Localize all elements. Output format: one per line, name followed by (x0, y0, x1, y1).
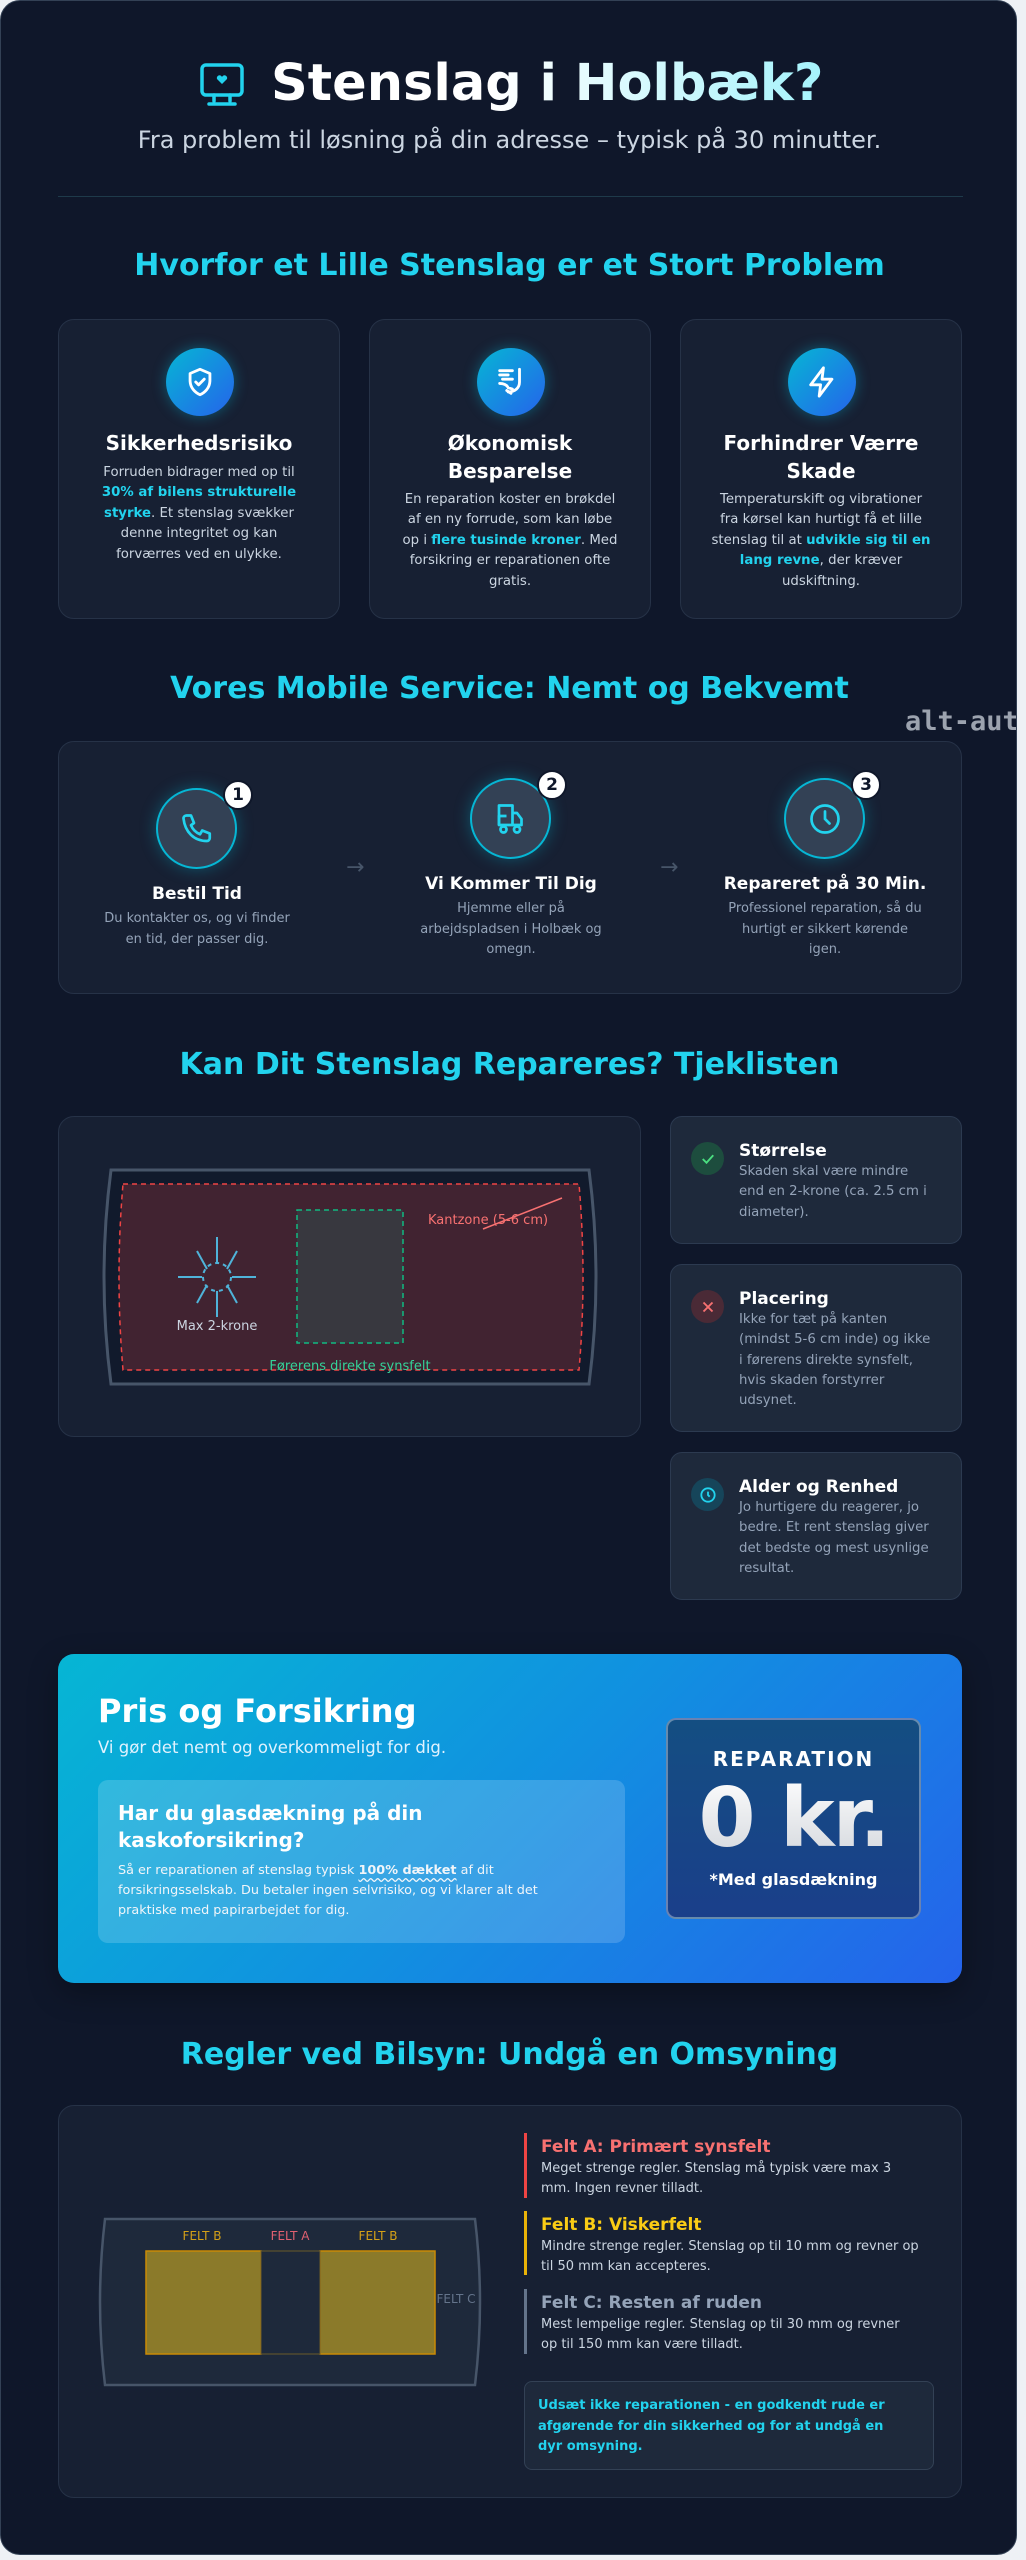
card text: Temperaturskift og vibrationer (720, 492, 922, 507)
card text: op i flere tusinde kroner. Med (403, 533, 617, 548)
badge 1: 1 (232, 785, 244, 805)
icon: shield (166, 348, 234, 416)
price title: Pris og Forsikring (98, 1692, 416, 1730)
edge zone (119, 1184, 583, 1370)
badge 2: 2 (546, 775, 558, 795)
rule: felt A: Meget strenge regler. Stenslag må typisk være max 3 (541, 2161, 891, 2176)
card text: fra kørsel kan hurtigt få et lille (720, 512, 922, 527)
icon: monitor heart (200, 63, 244, 106)
card text (102, 465, 296, 562)
step text: arbejdspladsen i Holbæk og (420, 922, 602, 936)
icon: cross (691, 1290, 724, 1323)
card text: forsikring er reparationen ofte (410, 553, 610, 568)
heading: inspection: Regler ved Bilsyn: Undgå en Omsyning (181, 2037, 838, 2072)
checklist: size: end en 2-krone (ca. 2.5 cm i (739, 1184, 927, 1199)
checklist: age: bedre. Et rent stenslag giver (739, 1520, 929, 1535)
card title: Økonomisk (448, 431, 572, 455)
subtitle: Fra problem til løsning på din adresse – typisk på 30 minutter. (138, 126, 881, 154)
card title: Skade (786, 459, 856, 483)
checklist: age: Alder og Renhed (739, 1477, 898, 1497)
insurance box: praktiske med papirarbejdet for dig. (118, 1903, 349, 1918)
icon: phone (156, 788, 237, 869)
panel: economy (369, 319, 651, 619)
price box: REPARATION (713, 1747, 874, 1771)
checklist: placement: (mindst 5-6 cm inde) og ikke (739, 1332, 930, 1347)
checklist: placement: udsynet. (739, 1393, 797, 1408)
rule: felt B: Felt B: Viskerfelt (541, 2215, 701, 2235)
rule: felt B: til 50 mm kan accepteres. (541, 2259, 711, 2274)
insurance box: forsikringsselskab. Du betaler ingen selvrisiko, og vi klarer alt det (118, 1883, 538, 1898)
card title: Forhindrer Værre (724, 431, 918, 455)
panel: price and insurance (58, 1654, 962, 1983)
zone diagram: FELT C (436, 2292, 476, 2306)
checklist: placement: Placering (739, 1289, 829, 1309)
icon: bolt (788, 348, 856, 416)
card text: gratis. (489, 574, 531, 589)
callout note: dyr omsyning. (538, 2439, 643, 2454)
panel: process (58, 741, 962, 994)
step text: en tid, der passer dig. (126, 932, 268, 946)
card text: lang revne, der kræver (740, 553, 902, 568)
panel: inspection rules (58, 2105, 962, 2498)
step text: Hjemme eller på (457, 901, 565, 916)
card title: Sikkerhedsrisiko (106, 431, 292, 455)
price subtitle: Vi gør det nemt og overkommeligt for dig. (98, 1738, 446, 1757)
card text: Forruden bidrager med op til (103, 465, 295, 480)
checklist: age: resultat. (739, 1561, 794, 1576)
card text: forværres ved en ulykke. (116, 547, 282, 562)
card text: stenslag til at udvikle sig til en (711, 533, 931, 548)
driver view zone (269, 1210, 431, 1374)
checklist: placement: Ikke for tæt på kanten (739, 1312, 887, 1327)
panel: safety (58, 319, 340, 619)
icon: check (691, 1142, 724, 1175)
checklist: size: Skaden skal være mindre (739, 1164, 908, 1179)
heading: why: Hvorfor et Lille Stenslag er et Stort Problem (134, 248, 885, 283)
rule: felt A (524, 2133, 944, 2198)
step text: hurtigt er sikkert kørende (742, 922, 908, 936)
rule: felt A: mm. Ingen revner tilladt. (541, 2181, 703, 2196)
heading: service: Vores Mobile Service: Nemt og Bekvemt (170, 671, 849, 706)
card text: udskiftning. (782, 574, 860, 589)
step 1 (104, 780, 290, 946)
checklist: age: det bedste og mest usynlige (739, 1541, 929, 1556)
step title: Vi Kommer Til Dig (425, 874, 597, 894)
icon: clock (691, 1478, 724, 1511)
edge zone: Kantzone (5-6 cm) (428, 1213, 548, 1228)
checklist: placement: i førerens direkte synsfelt, (739, 1353, 913, 1368)
arrow: → (660, 855, 678, 880)
card text (403, 492, 617, 589)
step text: igen. (809, 942, 841, 957)
icon: truck (470, 778, 551, 859)
step text (420, 900, 602, 957)
checklist: size: diameter). (739, 1205, 809, 1220)
heading: checklist: Kan Dit Stenslag Repareres? Tjeklisten (180, 1047, 839, 1082)
rule: felt B (524, 2211, 944, 2275)
step text: omegn. (486, 942, 536, 957)
badge 3 (851, 770, 881, 800)
icon: clock (784, 778, 865, 859)
rule: felt C: Mest lempelige regler. Stenslag op til 30 mm og revner (541, 2317, 900, 2332)
card text (711, 492, 931, 589)
driver view zone: Førerens direkte synsfelt (269, 1359, 431, 1374)
card title (724, 431, 918, 483)
price box (666, 1718, 921, 1919)
card text: denne integritet og kan (121, 526, 277, 541)
checklist: age: Jo hurtigere du reagerer, jo (739, 1500, 919, 1515)
rule: felt C: Felt C: Resten af ruden (541, 2293, 762, 2313)
price box: 0 kr. (698, 1771, 889, 1866)
zone diagram (98, 2218, 482, 2386)
insurance box: Har du glasdækning på din (118, 1801, 423, 1825)
card title (448, 431, 572, 483)
step text (728, 900, 922, 957)
zone diagram: FELT B (183, 2229, 221, 2243)
insurance box: Så er reparationen af stenslag typisk 100% dækket af dit (118, 1863, 494, 1878)
rule: felt C (524, 2289, 944, 2354)
icon: crack (177, 1237, 257, 1334)
title text: Stenslag i Holbæk? (271, 54, 823, 113)
card text: af en ny forrude, som kan løbe (408, 512, 612, 527)
checklist: size (670, 1116, 962, 1244)
badge 3: 3 (860, 775, 872, 795)
checklist: size: Størrelse (739, 1141, 827, 1161)
checklist: placement (670, 1264, 962, 1432)
insurance box (98, 1780, 625, 1943)
insurance box: kaskoforsikring? (118, 1828, 304, 1852)
checklist: placement: hvis skaden forstyrrer (739, 1373, 884, 1388)
price box: *Med glasdækning (710, 1870, 878, 1889)
rule: felt A: Felt A: Primært synsfelt (541, 2137, 770, 2157)
step 2 (420, 770, 602, 957)
icon: crack: Max 2-krone (177, 1319, 257, 1334)
step title: Bestil Tid (152, 884, 242, 904)
card text: styrke. Et stenslag svækker (104, 506, 294, 521)
badge 1 (223, 780, 253, 810)
step text: Professionel reparation, så du (728, 901, 922, 916)
step text: Du kontakter os, og vi finder (104, 911, 290, 926)
card text: 30% af bilens strukturelle (102, 485, 296, 500)
rule: felt C: op til 150 mm kan være tilladt. (541, 2337, 743, 2352)
panel: damage (680, 319, 962, 619)
card title: Besparelse (448, 459, 572, 483)
panel: windshield diagram (58, 1116, 641, 1437)
rule: felt B: Mindre strenge regler. Stenslag op til 10 mm og revner op (541, 2239, 919, 2254)
arrow: → (346, 855, 364, 880)
zone diagram: FELT B (359, 2229, 397, 2243)
step 3 (724, 770, 926, 957)
callout note (524, 2381, 934, 2470)
badge 2 (537, 770, 567, 800)
step title: Repareret på 30 Min. (724, 874, 926, 894)
title (200, 54, 823, 113)
zone diagram: FELT A (271, 2229, 310, 2243)
callout note: Udsæt ikke reparationen - en godkendt rude er (538, 2398, 885, 2413)
checklist: age (670, 1452, 962, 1600)
icon: money hand (477, 348, 545, 416)
step text (104, 911, 290, 946)
card text: En reparation koster en brøkdel (405, 492, 615, 507)
callout note: afgørende for din sikkerhed og for at undgå en (538, 2418, 883, 2434)
